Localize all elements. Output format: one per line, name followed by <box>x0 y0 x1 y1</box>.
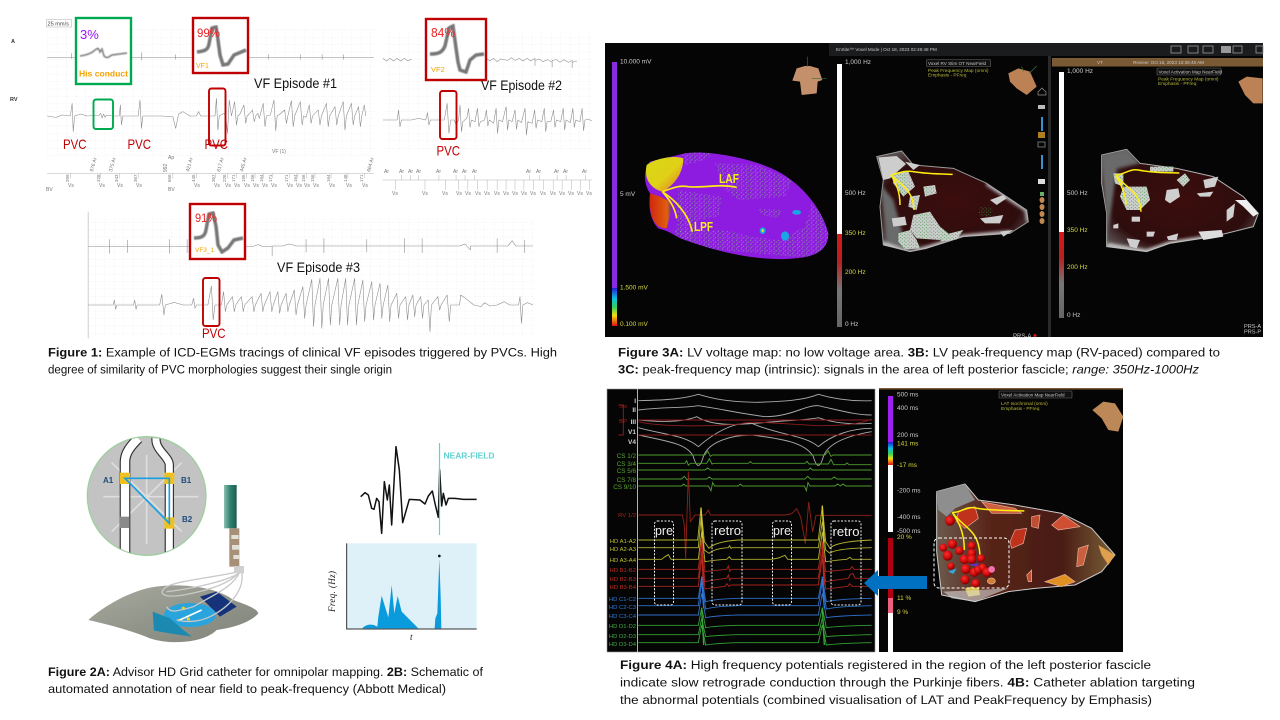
4B selector and legend: Voxel Activation Map NearField <box>1001 392 1065 397</box>
marker annotations: episode 2: Vs <box>577 191 583 197</box>
colour scale: peak frequency 3C: 0 Hz <box>1067 312 1080 319</box>
pre and retro dashed boxes <box>654 521 861 605</box>
colour scale: peak frequency 3B: 200 Hz <box>845 269 866 276</box>
peak-frequency map 3B <box>877 151 1028 253</box>
3C view selector and legend: Emphasis - PFreq <box>1158 81 1197 87</box>
marker annotations: episode 1: 992 <box>163 163 169 172</box>
HD grid spline B <box>638 538 872 589</box>
marker annotations: episode 1: Vs <box>244 183 250 189</box>
marker annotations: episode 2: Ar <box>462 169 467 175</box>
pre and retro dashed boxes: retro <box>832 525 860 539</box>
channel labels: II <box>632 407 636 414</box>
marker annotations: episode 1: Vs <box>362 183 368 189</box>
screen top bar text: Review: Oct 18, 2023 10:36:49 AM <box>1133 60 1204 65</box>
LAT colour scale: 141 ms <box>897 440 919 448</box>
marker annotations: episode 1: Vs <box>296 183 302 189</box>
screen top bar text: EnSite™ Voxel Mode | Oct 18, 2023 02:49:48 PM <box>836 47 937 52</box>
marker annotations: episode 2: Vs <box>475 191 481 197</box>
marker annotations: episode 2: Vs <box>568 191 574 197</box>
LAT colour scale: 400 ms <box>897 405 919 412</box>
caption: Figure 4: indicate slow retrograde conduction through the Purkinje fibers. 4B: Catheter ablation targeting <box>620 676 1195 690</box>
caption: Figure 3: 3C: peak-frequency map (intrinsic): signals in the area of left posterior fascicle; range: 350Hz-1000Hz <box>618 362 1199 376</box>
inset: VF1 99%: 99% <box>197 26 220 40</box>
marker annotations: episode 1: Vs <box>329 183 335 189</box>
fascicle labels LAF and LPF: LAF <box>719 172 739 186</box>
colour scale: peak frequency 3B: 350 Hz <box>845 230 866 237</box>
channel labels: CS 7/8 <box>617 477 636 484</box>
marker annotations: episode 1: 445 <box>191 174 196 182</box>
electrode labels A1 B1 B2 <box>103 476 193 524</box>
PRS labels 3C <box>1244 324 1261 336</box>
scale badge 25 mm/s <box>46 20 72 28</box>
marker annotations: episode 1: 148 <box>343 174 348 182</box>
colour scale: peak frequency 3C: 1,000 Hz <box>1067 68 1093 75</box>
electrode labels A1 B1 B2: B2 <box>182 515 193 524</box>
channel labels: HD C1-C2 <box>609 597 636 603</box>
channel labels: CS 5/6 <box>617 468 636 475</box>
emphasis colour scale <box>888 534 912 652</box>
channel labels A and RV <box>10 39 18 103</box>
marker annotations: episode 2: Vs <box>521 191 527 197</box>
marker annotations: episode 1: 367 <box>133 174 138 182</box>
caption: Figure 2: Figure 2A: Advisor HD Grid catheter for omnipolar mapping. 2B: Schematic of <box>48 665 484 679</box>
marker annotations: episode 1: 343 <box>114 174 119 182</box>
inset: VF2 84% <box>426 19 486 80</box>
marker annotations: episode 1: Ap <box>168 155 174 161</box>
inset: VF3_1 91%: 91% <box>195 211 217 225</box>
VF episode labels <box>254 75 562 275</box>
3C view selector and legend <box>1157 68 1223 87</box>
emphasis colour scale: 20 % <box>897 534 912 541</box>
LAT colour scale: -400 ms <box>897 514 921 521</box>
channel labels: I <box>634 398 636 405</box>
channel labels: HD B1-B2 <box>609 568 636 574</box>
chart axis labels: t <box>410 632 413 642</box>
marker annotations: episode 2: Ar <box>399 169 404 175</box>
marker annotations: episode 2: Vs <box>559 191 565 197</box>
PVC highlight boxes <box>94 88 456 326</box>
4B selector and legend: Emphasis - PFreq <box>1001 406 1040 412</box>
inset: His conduct 3% <box>76 18 131 84</box>
ECG grid: episodes 1 and 2 <box>47 28 592 336</box>
3B view selector and legend <box>926 60 990 78</box>
marker annotations: episode 1: 328 <box>96 174 101 182</box>
marker annotations: episode 2: Vs <box>512 191 518 197</box>
activation map 4B <box>937 484 1115 602</box>
panel: Figure 2A Advisor HD Grid catheter <box>87 437 258 642</box>
marker annotations: episode 1: 375 Ar <box>108 157 118 173</box>
LAT colour scale: -200 ms <box>897 488 921 494</box>
colour scale: voltage: 5 mV <box>620 191 636 198</box>
colour scale: voltage: 10.000 mV <box>620 58 652 66</box>
marker annotations: episode 1: 399 <box>65 174 70 182</box>
scale badge 25 mm/s: 25 mm/s <box>48 22 69 28</box>
3C view selector and legend: Voxel Activation Map NearField <box>1158 69 1223 74</box>
marker annotations: episode 1: Vs <box>287 183 293 189</box>
marker annotations: episode 2: Ar <box>582 169 587 175</box>
PVC labels: PVC <box>63 136 86 152</box>
inset: VF1 99%: VF1 <box>196 63 209 70</box>
marker annotations: episode 1: 617 Ar <box>216 157 226 173</box>
marker annotations: episode 2 <box>384 169 592 197</box>
PVC labels: PVC <box>202 325 226 341</box>
PVC labels: PVC <box>204 136 228 152</box>
pre and retro dashed boxes: retro <box>714 524 741 538</box>
channel labels: HD C3-C4 <box>609 614 637 620</box>
inset: VF2 84%: VF2 <box>431 65 445 74</box>
fascicle labels LAF and LPF <box>694 172 739 234</box>
chart axis labels: Freq. (Hz) <box>327 571 337 613</box>
4B selector and legend <box>999 391 1072 412</box>
marker annotations: episode 1: 156 <box>250 174 255 182</box>
HD grid spline C <box>638 577 872 618</box>
LAT colour scale: -17 ms <box>897 462 918 469</box>
PRS labels 3C: PRS-P <box>1244 330 1261 336</box>
marker annotations: episode 1: 156 <box>310 174 315 182</box>
panel: Figure 4B combined LAT and peak-frequency map <box>879 388 1123 652</box>
colour scale: peak frequency 3C: 200 Hz <box>1067 264 1088 271</box>
colour scale: peak frequency 3C <box>1059 68 1093 319</box>
PRS labels 3C: PRS-A <box>1244 324 1261 330</box>
channel labels: HD A1-A2 <box>610 539 636 545</box>
PRS-A indicator 3B: PRS-A <box>1013 334 1031 340</box>
surface ECG leads <box>638 394 872 465</box>
marker annotations: episode 1: Vs <box>117 183 123 189</box>
marker annotations: episode 1: Vs <box>313 183 319 189</box>
ECG tracings: episode 2 <box>383 58 592 190</box>
marker annotations: episode 2: Vs <box>484 191 490 197</box>
colour scale: peak frequency 3B: 1,000 Hz <box>845 59 871 66</box>
coronary sinus channels <box>638 451 872 491</box>
panel: Figure 4A intracardiac electrograms <box>607 389 875 652</box>
spike highlights <box>701 506 824 645</box>
electrogram trace <box>361 447 477 533</box>
colour scale: peak frequency 3B: 0 Hz <box>845 321 858 328</box>
marker annotations: episode 2: Ar <box>384 169 389 175</box>
marker annotations: episode 2: Vs <box>540 191 546 197</box>
caption: Figure 1: Figure 1: Example of ICD-EGMs tracings of clinical VF episodes triggered by PVCs. High <box>48 346 557 360</box>
marker annotations: episode 1: 367 <box>211 174 216 182</box>
marker annotations: episode 2: Vs <box>586 191 592 197</box>
VF episode labels: VF Episode #3 <box>277 259 360 275</box>
marker annotations: episode 2: Ar <box>436 169 441 175</box>
marker annotations: episode 1: VF (1) <box>272 149 286 155</box>
frequency-time chart <box>347 543 477 629</box>
arrow: blue pointer from 4B to 4A <box>864 570 927 596</box>
channel labels: III <box>631 419 636 426</box>
marker annotations: episode 2: Vs <box>530 191 536 197</box>
channel labels: CS 1/2 <box>617 453 636 460</box>
electrode labels A1 B1 B2: A1 <box>103 476 114 485</box>
marker annotations: episode 1: Vs <box>253 183 259 189</box>
channel labels: CS 9/10 <box>613 484 636 491</box>
channel labels: HD A2-A3 <box>610 547 637 553</box>
marker annotations: episode 2: Ar <box>563 169 568 175</box>
inset: VF3_1 91% <box>190 204 245 259</box>
marker annotations: episode 1: Vs <box>225 183 231 189</box>
marker annotations: episode 1: BV <box>168 187 175 193</box>
LAT colour scale: 200 ms <box>897 432 919 439</box>
inset circle: omnipolar bipole diagram <box>87 437 206 555</box>
marker annotations: episode 1 <box>46 149 376 193</box>
VF episode labels: VF Episode #2 <box>481 77 562 93</box>
marker annotations: episode 1: 656 <box>167 174 172 182</box>
3B view selector and legend: Peak Frequency Map (omni) <box>928 68 989 74</box>
LV voltage map 3A <box>645 152 832 260</box>
marker annotations: episode 2: Vs <box>456 191 462 197</box>
black screen background <box>879 388 1123 652</box>
RV pacing channel <box>638 472 872 558</box>
colour scale: voltage: 0.100 mV <box>620 321 648 328</box>
channel labels A and RV: RV <box>10 97 18 103</box>
channel traces <box>618 394 872 645</box>
HD grid spline D <box>638 608 872 645</box>
marker annotations: episode 2: Ar <box>472 169 477 175</box>
LAT colour scale: 500 ms <box>897 392 919 398</box>
marker annotations: episode 1: 421 Ar <box>185 157 195 173</box>
marker annotations: episode 1: 226 <box>222 174 227 182</box>
emphasis colour scale: 11 % <box>897 595 912 602</box>
near-field marker line: NEAR-FIELD <box>444 452 495 460</box>
marker annotations: episode 2: Ar <box>416 169 421 175</box>
marker annotations: episode 2: Vs <box>503 191 509 197</box>
marker annotations: episode 1: 664 Ar <box>366 157 376 173</box>
colour scale: voltage: 1.500 mV <box>620 284 648 292</box>
channel labels <box>609 398 637 648</box>
marker annotations: episode 1: 156 <box>301 174 306 182</box>
panel: Figure 1 ICD-EGM tracings <box>10 18 592 341</box>
screen top bar text: VT <box>1097 60 1103 65</box>
panel: Figure 2B near-field signal <box>327 443 495 642</box>
marker annotations: episode 1: Vs <box>136 183 142 189</box>
emphasis colour scale: 9 % <box>897 609 908 616</box>
black recording background <box>607 389 875 652</box>
marker annotations: episode 1: Vs <box>214 183 220 189</box>
caption: Figure 2: automated annotation of near field to peak-frequency (Abbott Medical) <box>48 682 446 696</box>
marker annotations: episode 1: Vs <box>99 183 105 189</box>
channel labels: V4 <box>628 439 636 446</box>
marker annotations: episode 1: Vs <box>346 183 352 189</box>
marker annotations: episode 1: 445 Ar <box>239 157 249 173</box>
4B selector and legend: LAT Isochronal (omni) <box>1001 401 1048 407</box>
colour scale: peak frequency 3B: 500 Hz <box>845 190 866 197</box>
marker annotations: episode 2: Ar <box>526 169 531 175</box>
inset: His conduct 3%: His conduct <box>79 70 128 78</box>
ECG tracings: episode 1 <box>47 53 374 178</box>
colour scale: peak frequency 3B <box>837 59 871 328</box>
channel labels: CS 3/4 <box>617 461 636 468</box>
channel labels: RV 1/2 <box>618 513 636 519</box>
marker annotations: episode 1: 164 <box>259 174 264 182</box>
marker annotations: episode 2: Vs <box>442 191 448 197</box>
inset: VF3_1 91%: VF3_1 <box>195 247 215 254</box>
marker annotations: episode 1: Vs <box>68 183 74 189</box>
torso orientation icon <box>792 57 827 95</box>
chart axis labels <box>327 571 413 642</box>
marker annotations: episode 1: 164 <box>326 174 331 182</box>
marker annotations: episode 2: Vs <box>392 191 398 197</box>
channel labels: V1 <box>628 429 636 436</box>
marker annotations: episode 1: 171 <box>284 174 289 182</box>
caption: Figure 4: the abnormal potentials (combined visualisation of LAT and PeakFrequency by Emphasis) <box>620 693 1152 707</box>
channel labels: HD A3-A4 <box>610 558 637 564</box>
black screen background <box>605 43 1263 337</box>
marker annotations: episode 1: Vs <box>304 183 310 189</box>
inset: VF2 84%: 84% <box>431 26 455 40</box>
catheter on endocardial surface <box>88 485 258 642</box>
marker annotations: episode 2: Ar <box>536 169 541 175</box>
marker annotations: episode 2: Vs <box>494 191 500 197</box>
heart orientation icon 3C <box>1238 77 1263 103</box>
marker annotations: episode 1: Vs <box>234 183 240 189</box>
3C view selector and legend: Peak Frequency Map (omni) <box>1158 76 1219 82</box>
pre and retro dashed boxes: pre <box>773 524 791 538</box>
colour scale: peak frequency 3C: 500 Hz <box>1067 190 1088 197</box>
caption: Figure 4: Figure 4A: High frequency potentials registered in the region of the left posterior fascicle <box>620 658 1151 672</box>
PVC labels: PVC <box>436 142 460 158</box>
marker annotations: episode 2: Vs <box>465 191 471 197</box>
channel labels: HD B2-B3 <box>609 577 637 583</box>
caption: Figure 3 <box>618 346 1220 376</box>
pre and retro dashed boxes: pre <box>655 524 673 538</box>
channel labels A and RV: A <box>11 39 15 45</box>
caption: Figure 2 <box>48 665 484 696</box>
marker annotations: episode 2: Vs <box>422 191 428 197</box>
ECG tracings: episode 3 <box>88 212 533 338</box>
channel labels: HD C2-C3 <box>609 605 637 611</box>
3B view selector and legend: Voxel RV Stim OT NearField <box>928 61 986 66</box>
fascicle labels LAF and LPF: LPF <box>694 220 713 234</box>
caption: Figure 3: Figure 3A: LV voltage map: no low voltage area. 3B: LV peak-frequency map (RV-paced) compared to <box>618 346 1220 360</box>
caption: Figure 1: degree of similarity of PVC morphologies suggest their single origin <box>48 362 392 376</box>
marker annotations: episode 2: Ar <box>408 169 413 175</box>
channel labels: HD D3-D4 <box>609 642 637 648</box>
channel labels: 200 <box>619 404 627 409</box>
marker annotations: episode 1: 164 <box>293 174 298 182</box>
screen top bar text <box>836 46 1263 65</box>
channel labels: HD D1-D2 <box>609 624 636 630</box>
panel: Figure 3 mapping screens <box>605 43 1263 340</box>
marker annotations: episode 1: Vs <box>271 183 277 189</box>
marker annotations: episode 1: BV <box>46 187 53 193</box>
channel labels: HD D2-D3 <box>609 634 637 640</box>
electrode labels A1 B1 B2: B1 <box>181 476 192 485</box>
3B toolbar icons <box>1038 88 1046 224</box>
caption: Figure 1 <box>48 346 557 376</box>
marker annotations: episode 1: 171 <box>268 174 273 182</box>
marker annotations: episode 2: Ar <box>453 169 458 175</box>
dashed region of interest <box>934 538 1009 588</box>
marker annotations: episode 1: Vs <box>194 183 200 189</box>
3B view selector and legend: Emphasis - PFreq <box>928 72 967 78</box>
LAT colour scale <box>888 392 921 535</box>
heart orientation icon 4B <box>1092 402 1123 432</box>
marker annotations: episode 2: Vs <box>550 191 556 197</box>
marker annotations: episode 2: Ar <box>554 169 559 175</box>
inset: VF1 99% <box>193 18 248 73</box>
LAT colour scale: -500 ms <box>897 528 921 535</box>
channel labels: HD B3-B4 <box>609 585 637 591</box>
HD grid spline A <box>638 506 872 562</box>
channel labels: BP <box>619 419 627 425</box>
PVC labels: PVC <box>128 136 151 152</box>
blood pressure lines <box>618 405 872 435</box>
PVC labels <box>63 136 460 341</box>
near-field marker line <box>440 443 495 535</box>
VF episode labels: VF Episode #1 <box>254 75 337 91</box>
marker annotations: episode 1: Vs <box>262 183 268 189</box>
colour scale: voltage <box>612 58 652 328</box>
heart orientation icon 3B <box>1008 66 1037 95</box>
marker annotations: episode 1: 195 <box>241 174 246 182</box>
marker annotations: episode 1: 976 Ar <box>89 157 99 173</box>
caption: Figure 4 <box>620 658 1195 707</box>
inset: His conduct 3%: 3% <box>80 27 99 42</box>
marker annotations: episode 1: 171 <box>231 174 236 182</box>
peak-frequency map 3C <box>1102 149 1258 252</box>
colour scale: peak frequency 3C: 350 Hz <box>1067 227 1088 234</box>
marker annotations: episode 1: 171 <box>359 174 364 182</box>
